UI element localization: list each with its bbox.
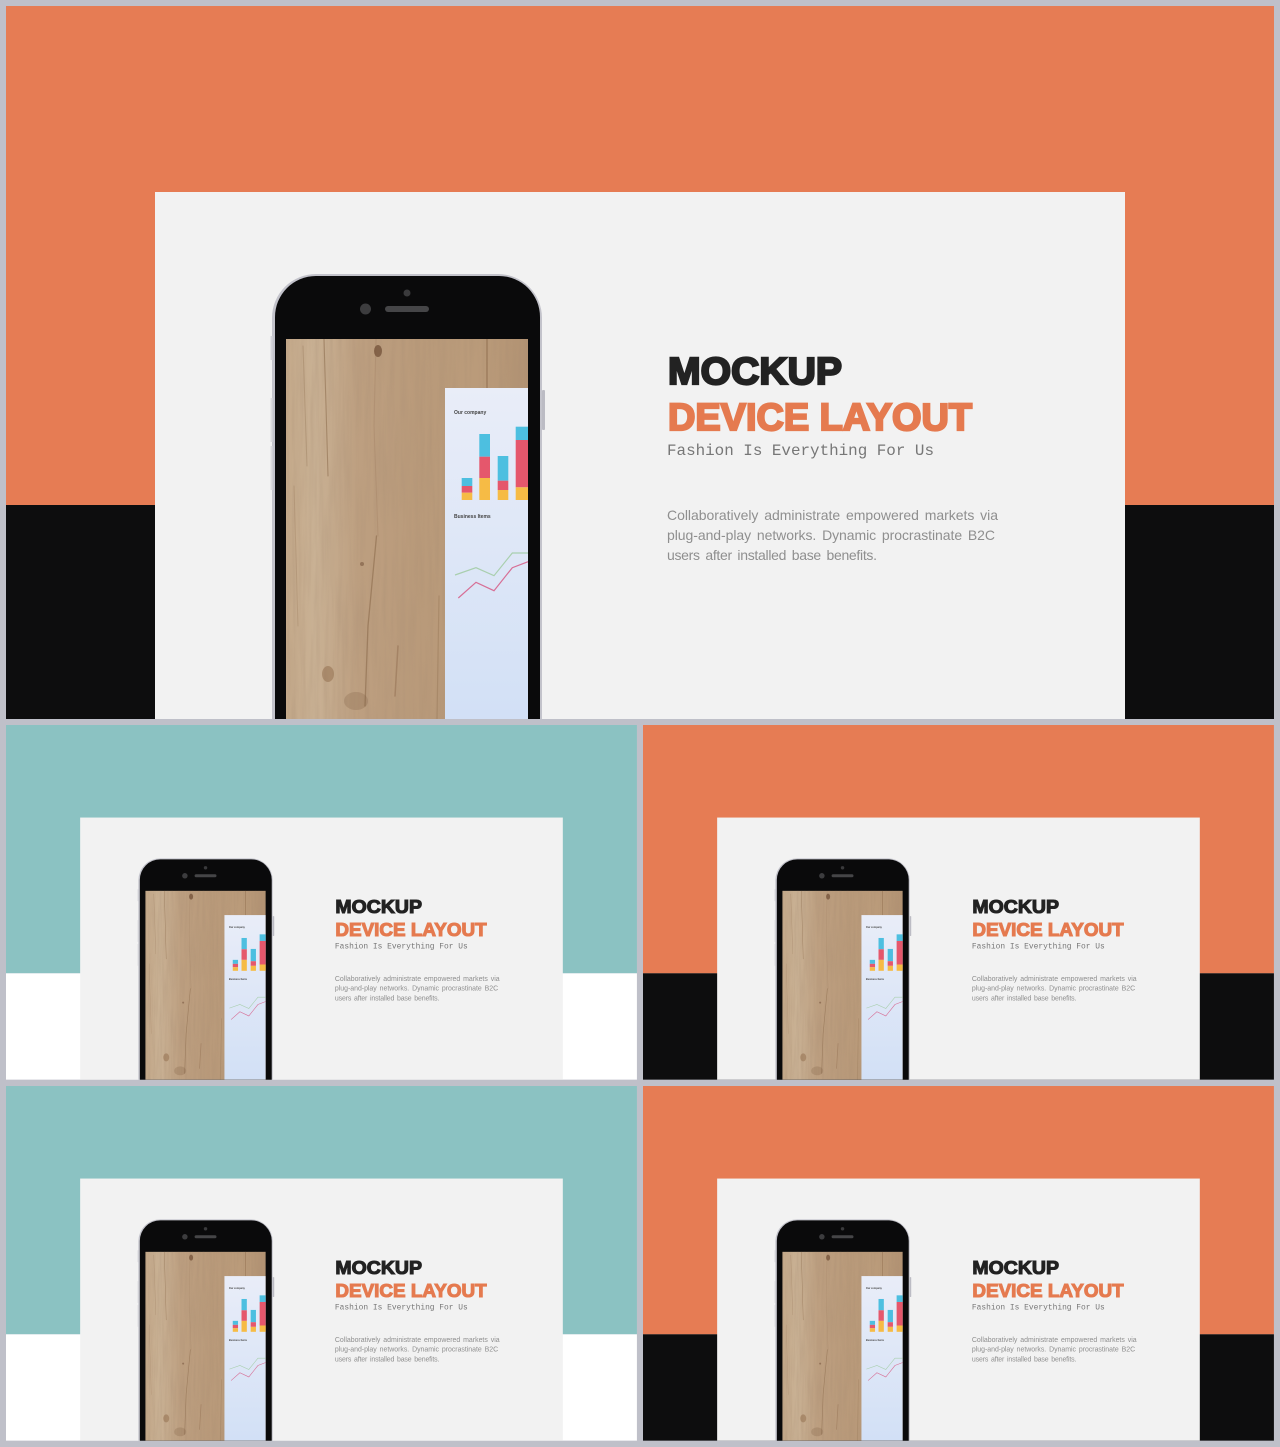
subtitle: Fashion Is Everything For Us [335, 1303, 468, 1312]
phone chart captions: Business Items [866, 978, 885, 981]
body text: plug-and-play networks. Dynamic procrastinate B2C [972, 986, 1135, 993]
body text: Collaboratively administrate empowered markets via [335, 976, 500, 983]
phone chart captions [229, 1287, 248, 1342]
heading: mockup: MOCKUP [972, 1258, 1059, 1279]
heading: device layout: DEVICE LAYOUT [335, 920, 487, 941]
slide: orange and black, lower [643, 1086, 1274, 1447]
heading: mockup: MOCKUP [335, 897, 422, 918]
white panel [80, 1179, 563, 1441]
phone chart captions [454, 410, 491, 520]
body text: users after installed base benefits. [972, 996, 1076, 1003]
phone chart captions: Our company [866, 1287, 882, 1290]
subtitle: Fashion Is Everything For Us [972, 942, 1105, 951]
white panel [155, 192, 1125, 719]
body text [972, 976, 1137, 1003]
phone chart captions: Our company [229, 926, 245, 929]
teal background [6, 725, 637, 973]
phone mockup [774, 858, 912, 1080]
heading: device layout: DEVICE LAYOUT [668, 397, 972, 439]
body text: users after installed base benefits. [972, 1357, 1076, 1364]
heading: device layout: DEVICE LAYOUT [335, 1281, 487, 1302]
phone chart captions: Our company [454, 410, 486, 416]
orange background [643, 1086, 1274, 1334]
heading: mockup: MOCKUP [335, 1258, 422, 1279]
body text [972, 1337, 1137, 1364]
slide: teal and white, upper [6, 725, 637, 1080]
slide: orange and black, upper [643, 725, 1274, 1080]
body text [335, 976, 500, 1003]
body text: plug-and-play networks. Dynamic procrastinate B2C [335, 986, 498, 993]
heading: device layout: DEVICE LAYOUT [972, 1281, 1124, 1302]
white panel [717, 1179, 1200, 1441]
slide: teal and white, lower [6, 1086, 637, 1447]
phone chart captions [866, 926, 885, 981]
body text: Collaboratively administrate empowered markets via [667, 507, 998, 523]
orange background [643, 725, 1274, 973]
phone mockup [775, 1219, 911, 1447]
black band [643, 1334, 1274, 1441]
heading: mockup: MOCKUP [972, 897, 1059, 918]
subtitle: Fashion Is Everything For Us [335, 942, 468, 951]
body text [335, 1337, 500, 1364]
phone mockup [138, 1219, 274, 1447]
body text: users after installed base benefits. [667, 547, 877, 563]
body text: plug-and-play networks. Dynamic procrastinate B2C [335, 1347, 498, 1354]
white band [6, 1334, 637, 1441]
body text: Collaboratively administrate empowered markets via [972, 1337, 1137, 1344]
body text: plug-and-play networks. Dynamic procrastinate B2C [972, 1347, 1135, 1354]
phone chart captions: Business Items [229, 978, 248, 981]
body text [668, 510, 998, 560]
black band [6, 505, 1274, 719]
heading: device layout: DEVICE LAYOUT [972, 920, 1124, 941]
subtitle: Fashion Is Everything For Us [667, 442, 934, 460]
white band [6, 973, 637, 1080]
phone chart captions: Business Items [229, 1339, 248, 1342]
body text: plug-and-play networks. Dynamic procrastinate B2C [667, 527, 995, 543]
phone mockup [138, 858, 274, 1080]
phone chart captions: Our company [229, 1287, 245, 1290]
body text: users after installed base benefits. [335, 996, 439, 1003]
phone chart captions: Business Items [866, 1339, 885, 1342]
orange background [6, 6, 1274, 505]
slide: large orange and black [6, 6, 1274, 719]
phone chart captions: Business Items [454, 514, 491, 520]
subtitle: Fashion Is Everything For Us [972, 1303, 1105, 1312]
white panel [80, 818, 563, 1080]
heading: mockup: MOCKUP [668, 351, 842, 393]
phone chart captions [229, 926, 248, 981]
teal background [6, 1086, 637, 1334]
phone chart captions: Our company [866, 926, 882, 929]
phone mockup [270, 274, 545, 719]
black band [643, 973, 1274, 1080]
body text: Collaboratively administrate empowered markets via [335, 1337, 500, 1344]
white panel [717, 818, 1200, 1080]
phone chart captions [866, 1287, 885, 1342]
body text: users after installed base benefits. [335, 1357, 439, 1364]
body text: Collaboratively administrate empowered markets via [972, 976, 1137, 983]
